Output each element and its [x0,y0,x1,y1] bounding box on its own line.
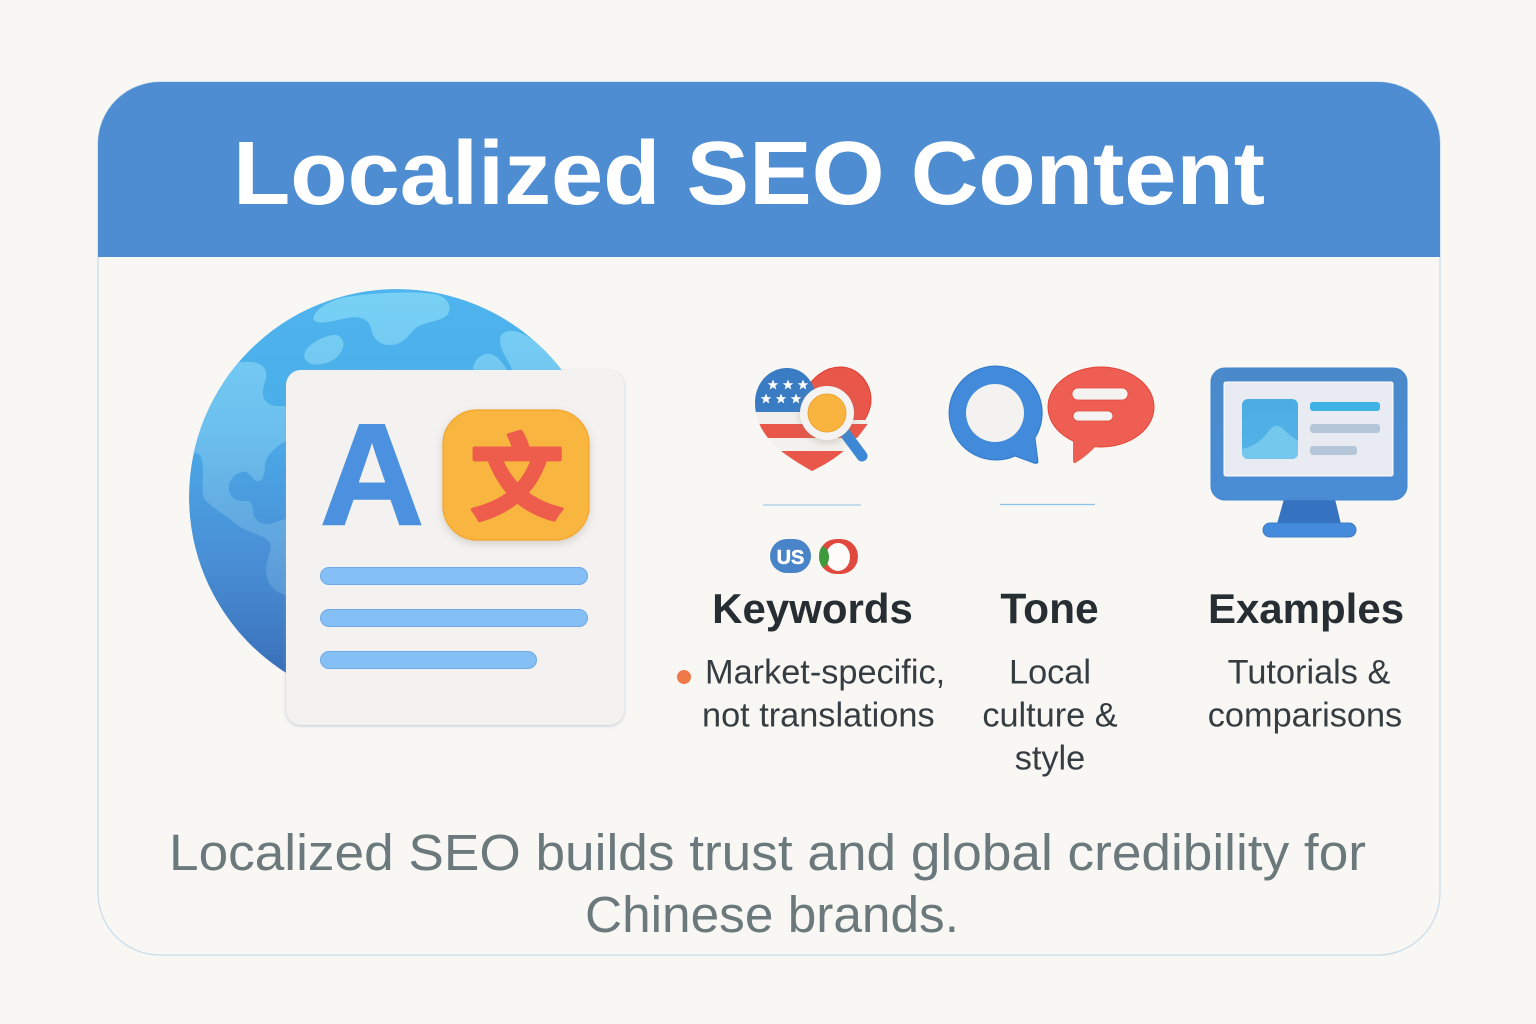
column: examples [1208,368,1407,734]
body text: Tutorials & [1228,654,1390,692]
bullet dot [677,670,691,684]
column: tone [949,366,1154,778]
panel: main card [98,82,1440,955]
illustration: globe with translated document [180,289,624,725]
badge: US: US [777,547,804,569]
document card [286,370,624,725]
body text: Local [1009,654,1091,692]
divider [1000,504,1095,506]
body text: not translations [702,696,935,734]
heading: Tone [1000,586,1099,633]
icon: globe [189,289,562,673]
icon: Chinese character tile: 文 [470,404,564,539]
badge: US [770,539,811,573]
heading: Keywords [712,585,913,632]
body text: culture & [982,696,1118,734]
body text: comparisons [1208,696,1402,734]
icon: speech bubbles [949,366,1154,463]
title: Localized SEO Content [233,124,1265,224]
footer statement: Chinese brands. [585,886,959,943]
divider [763,504,861,506]
icon: monitor [1211,368,1407,537]
text lines [320,568,588,668]
icon: flag heart with magnifier [750,365,871,473]
body text: Market-specific, [705,654,945,692]
letter A: A [320,394,424,556]
column: keywords [677,365,945,734]
footer statement: Localized SEO builds trust and global credibility for [169,824,1366,881]
header banner [98,82,1440,257]
badge: ring [819,539,858,574]
icon: Chinese character tile [443,404,589,540]
body text: style [1015,740,1085,778]
heading: Examples [1208,585,1404,632]
